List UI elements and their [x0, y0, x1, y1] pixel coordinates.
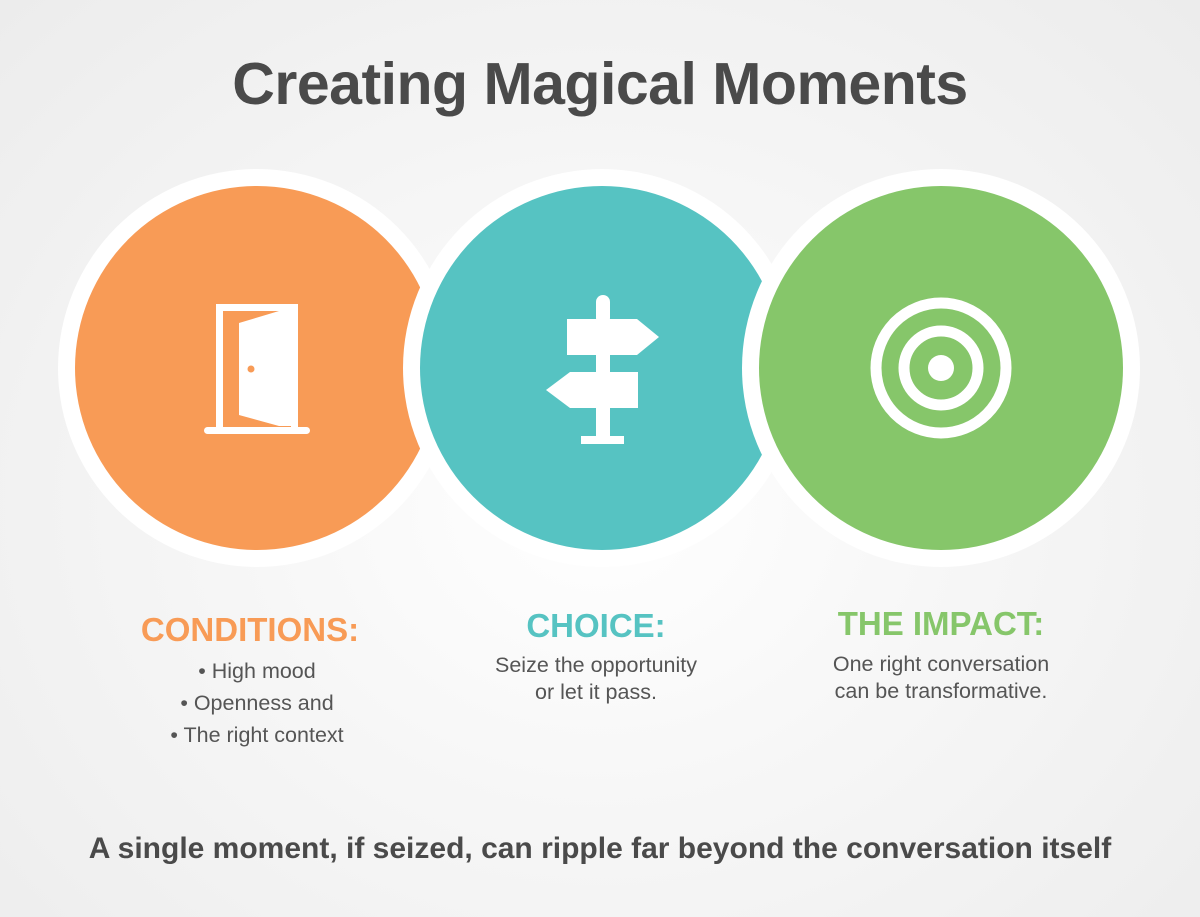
- text: conditions: [170, 659, 344, 747]
- text: choice: [495, 653, 697, 704]
- text: impact: One right conversation: [833, 652, 1049, 676]
- heading: impact: THE IMPACT:: [838, 605, 1044, 642]
- title: Creating Magical Moments: [232, 51, 968, 117]
- footer statement: A single moment, if seized, can ripple far beyond the conversation itself: [89, 832, 1111, 865]
- text: impact: [833, 652, 1049, 703]
- icon: target: [876, 303, 1006, 433]
- heading: conditions: CONDITIONS:: [141, 611, 359, 648]
- text: choice: or let it pass.: [535, 680, 657, 704]
- text: conditions: • Openness and: [180, 691, 334, 715]
- heading: choice: CHOICE:: [526, 607, 666, 644]
- circle: conditions: [58, 169, 456, 567]
- text: impact: can be transformative.: [835, 679, 1047, 703]
- circle: impact: [742, 169, 1140, 567]
- icon: door: [204, 304, 310, 434]
- text: conditions: • High mood: [198, 659, 316, 683]
- icon: signpost: [546, 295, 659, 444]
- circle: choice: [403, 169, 801, 567]
- text: conditions: • The right context: [170, 723, 344, 747]
- text: choice: Seize the opportunity: [495, 653, 697, 677]
